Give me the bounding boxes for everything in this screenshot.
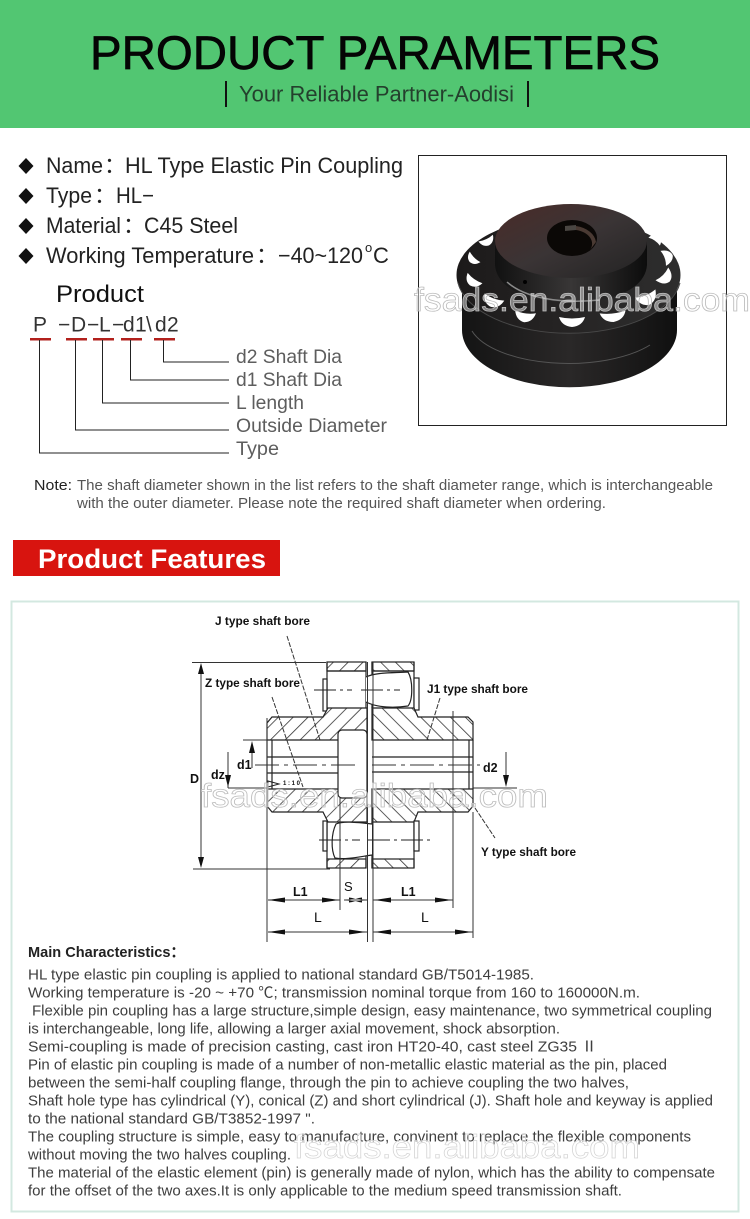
section banner: product features [13,540,280,576]
characteristics text block [27,966,715,1200]
connector lines [40,340,229,453]
drawing labels: D [190,772,199,786]
central cavity [338,730,367,798]
drawing labels: Z type shaft bore [205,678,300,690]
spec: material: ： [123,213,145,238]
drawing labels: 1 : 1 0 [283,781,301,787]
spec: material [18,213,238,238]
characteristics text block: between the semi-half coupling flange, through the pin to achieve coupling the two halves, [28,1074,629,1092]
note: Note: [34,477,72,494]
product code breakdown [30,281,387,460]
spec: type: HL− [116,183,154,208]
spec: type: Type [46,183,92,208]
panel: features [12,602,738,1212]
spec: name: ： [104,153,126,178]
connector labels: Type [236,438,279,460]
hub right [372,708,473,822]
specification list [18,153,403,268]
connector labels: Outside Diameter [236,415,387,437]
connector labels: d1 Shaft Dia [236,369,342,391]
spec: type [18,183,154,208]
product photo: coupling [456,204,680,387]
watermark: middle: fsads.en.alibaba.com [201,777,548,814]
heading: product: Product [56,281,144,308]
characteristics text block: for the offset of the two axes.It is only applicable to the medium speed transmission shaft. [28,1182,622,1200]
characteristics text block: The material of the elastic element (pin) is generally made of nylon, which has the ability to compensate [28,1164,715,1182]
drawing labels: J type shaft bore [215,616,310,628]
connector labels [236,346,387,460]
spec: name: Name [46,153,103,178]
drawing labels: S [344,879,353,894]
drawing labels: L1 [401,885,416,899]
characteristics text block: to the national standard GB/T3852-1997 ". [28,1110,315,1128]
watermark: bottom: fsads.en.alibaba.com [294,1128,640,1165]
spec: working temperature: C [373,243,389,268]
spec: working temperature [18,240,389,268]
arrowheads [198,663,509,934]
red underlines [30,338,175,340]
characteristics text block: Flexible pin coupling has a large structure,simple design, easy maintenance, two symmetrical coupling [32,1002,712,1020]
characteristics text block: HL type elastic pin coupling is applied to national standard GB/T5014-1985. [28,966,534,984]
characteristics text block: Shaft hole type has cylindrical (Y), conical (Z) and short cylindrical (J). Shaft hole and keyway is applied [28,1092,713,1110]
characteristics text block: without moving the two halves coupling. [27,1146,291,1164]
spec: material: C45 Steel [144,213,238,238]
spec: working temperature: o [365,240,372,255]
drawing labels: dz [211,768,225,782]
drawing labels: d2 [483,761,498,775]
product photo panel [418,156,726,426]
hub left [267,708,367,822]
code: P-D-L-d1\d2: P −D−L−d1\d2 [33,314,179,336]
heading: main characteristics: Main Characteristics： [28,944,185,961]
upper pin [314,662,419,711]
header band [0,0,750,128]
characteristics text block: Semi-coupling is made of precision casting, cast iron HT20-40, cast steel ZG35 Ⅱ [28,1038,597,1056]
dimension lines [192,636,517,942]
characteristics text block: Pin of elastic pin coupling is made of a number of non-metallic elastic material as the pin, placed [28,1056,667,1074]
spec: name: HL Type Elastic Pin Coupling [125,153,403,178]
characteristics text block: is interchangeable, long life, allowing a larger axial movement, shock absorption. [28,1020,560,1038]
note: with the outer diameter. Please note the required shaft diameter when ordering. [76,495,606,512]
drawing labels: L [314,909,322,925]
technical drawing: coupling section [190,616,576,942]
drawing labels [190,616,576,925]
drawing labels: J1 type shaft bore [427,684,528,696]
drawing labels: d1 [237,758,252,772]
lower pin [319,821,430,868]
characteristics text block: Working temperature is -20 ~ +70 ℃; transmission nominal torque from 160 to 160000N.m. [28,984,640,1002]
drawing labels: L1 [293,885,308,899]
subtitle: Your Reliable Partner-Aodisi [239,82,514,106]
characteristics text block: The coupling structure is simple, easy to manufacture, convinent to replace the flexible components [28,1128,691,1146]
spec: working temperature: ： [256,243,278,268]
drawing labels: L [421,909,429,925]
spec: material: Material [46,213,121,238]
spec: working temperature: −40~120 [278,243,363,268]
note [34,477,713,512]
drawing labels: Y type shaft bore [481,847,576,859]
connector labels: d2 Shaft Dia [236,346,342,368]
title: PRODUCT PARAMETERS [90,27,660,80]
spec: working temperature: Working Temperature [46,243,254,268]
watermark: top: fsads.en.alibaba.com [414,281,750,318]
spec: type: ： [94,183,116,208]
connector labels: L length [236,392,304,414]
note: The shaft diameter shown in the list refers to the shaft diameter range, which is interchangeable [77,477,713,494]
section banner: product features: Product Features [38,544,266,574]
